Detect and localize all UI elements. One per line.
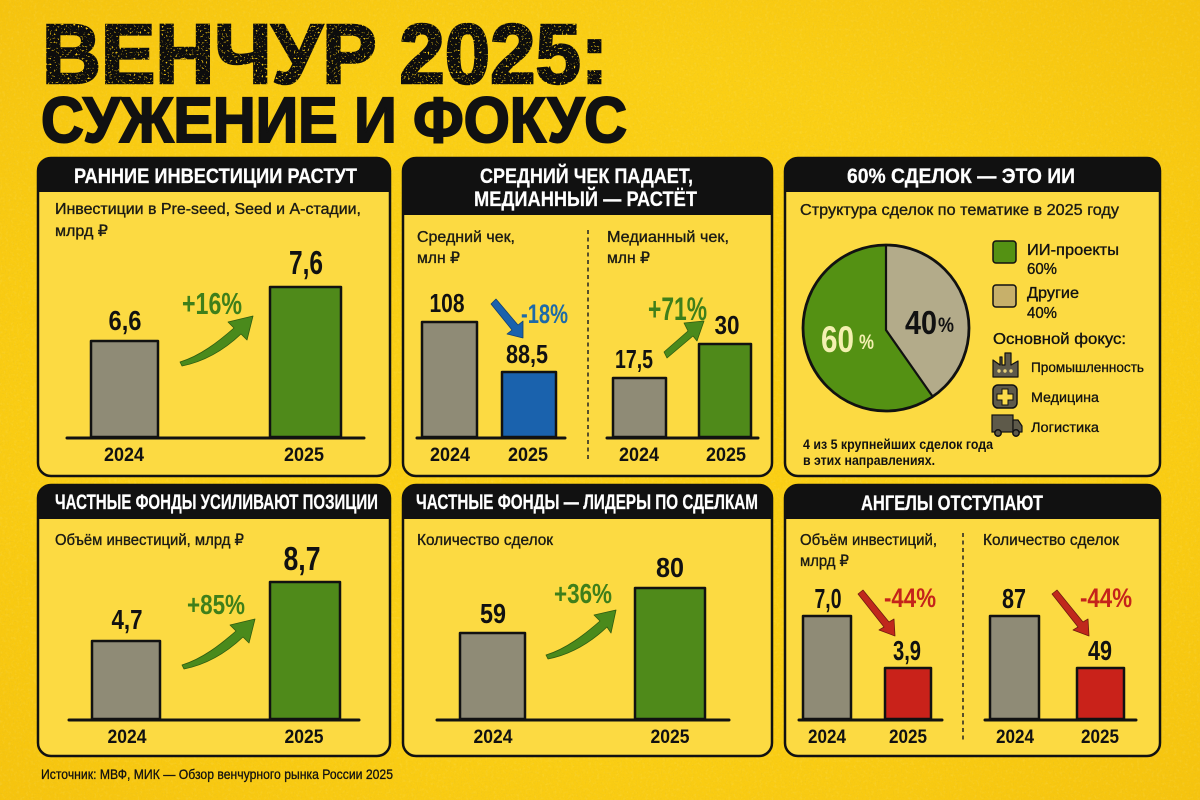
bar chart: median check: 17,5 (615, 344, 653, 374)
subtitle: private funds deals: Количество сделок (417, 532, 554, 549)
icon: medicine (993, 385, 1017, 408)
subtitle: angels volume: Объём инвестиций, (800, 532, 937, 549)
title: ВЕНЧУР 2025: (42, 7, 608, 101)
note: в этих направлениях. (803, 452, 935, 468)
bar chart: early investments: 7,6 (289, 244, 323, 281)
growth label +71%: +71% (648, 291, 707, 327)
subtitle: angels deals: Количество сделок (983, 532, 1120, 549)
heading: angels: АНГЕЛЫ ОТСТУПАЮТ (861, 492, 1043, 515)
bar chart: angels volume: 2025 (889, 727, 927, 748)
bar chart: median check: 2024 (619, 445, 659, 466)
legend: 60% (1027, 261, 1057, 278)
growth label +16%: +16% (182, 286, 242, 321)
note (803, 436, 993, 468)
bar chart: angels volume (799, 583, 942, 748)
bar chart: angels deals: 49 (1088, 635, 1112, 666)
label: medicine: Медицина (1031, 389, 1099, 405)
bar chart: average check: 108 (430, 288, 464, 318)
bar chart: private funds volume: 2024 (108, 727, 147, 748)
subtitle: private funds volume: Объём инвестиций, млрд ₽ (55, 532, 244, 549)
bar chart: private funds volume: 8,7 (284, 540, 320, 577)
bar chart: private funds deals (437, 552, 729, 748)
icon: factory (993, 353, 1018, 377)
legend: 40% (1027, 305, 1057, 322)
note: 4 из 5 крупнейших сделок года (803, 436, 993, 452)
arrow: growth (546, 610, 616, 659)
heading: early investments: РАННИЕ ИНВЕСТИЦИИ РАСТУТ (74, 165, 357, 188)
bar chart: private funds volume: 2025 (284, 727, 324, 748)
bar chart: early investments (67, 244, 364, 466)
bar chart: early investments: 6,6 (108, 305, 142, 336)
label: logistics: Логистика (1031, 419, 1099, 435)
legend: ИИ-проекты (1027, 242, 1119, 259)
title (41, 7, 627, 156)
bar chart: private funds volume (69, 540, 359, 748)
subtitle: early investments: млрд ₽ (55, 223, 108, 240)
subtitle: early investments (55, 201, 361, 240)
subtitle: average check: Средний чек, (417, 229, 515, 246)
heading: average and median check (474, 164, 697, 211)
source note: Источник: МВФ, МИК — Обзор венчурного рынка России 2025 (41, 766, 393, 782)
arrow: decline (858, 590, 895, 636)
decline label -44%: -44% (884, 583, 936, 613)
bar chart: private funds deals: 59 (480, 598, 506, 629)
panel: AI deals (785, 158, 1160, 476)
panel: angels (785, 485, 1160, 756)
subtitle: early investments: Инвестиции в Pre-seed, Seed и A-стадии, (55, 201, 361, 218)
bar chart: angels deals: 2024 (996, 727, 1034, 748)
subtitle: average check: млн ₽ (417, 250, 460, 267)
label: industry: Промышленность (1031, 359, 1144, 375)
pie chart: % (859, 331, 874, 354)
bar chart: angels deals: 87 (1002, 583, 1026, 614)
title: СУЖЕНИЕ И ФОКУС (41, 84, 627, 156)
arrow: growth (182, 619, 255, 669)
subtitle: median check: млн ₽ (607, 250, 650, 267)
bar chart: private funds volume: 4,7 (112, 604, 142, 635)
bar chart: angels deals: 2025 (1081, 727, 1119, 748)
bar chart: average check: 88,5 (506, 339, 548, 369)
legend (993, 241, 1119, 322)
panel: private funds volume (38, 485, 390, 756)
bar chart: median check: 30 (714, 310, 740, 340)
bar chart: early investments: 2025 (284, 445, 324, 466)
bar chart: average check: 2025 (508, 445, 548, 466)
heading: AI deals: 60% СДЕЛОК — ЭТО ИИ (847, 165, 1075, 188)
subtitle: angels volume (800, 532, 937, 570)
panel: private funds deals (403, 485, 772, 756)
bar chart: angels volume: 7,0 (814, 583, 842, 614)
pie chart: 40 (905, 304, 937, 341)
heading: private funds volume: ЧАСТНЫЕ ФОНДЫ УСИЛИВАЮТ ПОЗИЦИИ (55, 491, 378, 514)
subtitle: average check (417, 229, 515, 267)
pie chart (803, 245, 970, 411)
bar chart: angels volume: 3,9 (893, 635, 921, 666)
bar chart: private funds deals: 2024 (474, 727, 513, 748)
growth label +85%: +85% (187, 589, 245, 620)
heading: average and median check: МЕДИАННЫЙ — РАСТЁТ (474, 187, 697, 211)
bar chart: median check (607, 310, 758, 466)
arrow: decline (1052, 590, 1089, 636)
subtitle: angels volume: млрд ₽ (800, 553, 849, 570)
bar chart: private funds deals: 2025 (650, 727, 690, 748)
legend: Другие (1027, 285, 1079, 302)
bar chart: early investments: 2024 (104, 445, 144, 466)
bar chart: average check (417, 288, 565, 466)
icon: truck (992, 415, 1022, 436)
bar chart: angels volume: 2024 (808, 727, 846, 748)
panel: early investments (38, 158, 390, 476)
focus heading: Основной фокус: (993, 331, 1126, 348)
pie chart: 60 (821, 319, 854, 360)
bar chart: average check: 2024 (430, 445, 470, 466)
heading: average and median check: СРЕДНИЙ ЧЕК ПАДАЕТ, (480, 164, 693, 188)
arrow: growth (180, 316, 253, 366)
heading: private funds deals: ЧАСТНЫЕ ФОНДЫ — ЛИДЕРЫ ПО СДЕЛКАМ (416, 491, 758, 514)
subtitle: median check: Медианный чек, (607, 229, 729, 246)
pie chart: % (938, 314, 954, 337)
panel: average and median check (403, 158, 772, 476)
arrow: decline (491, 299, 523, 338)
subtitle: AI deals: Структура сделок по тематике в 2025 году (800, 202, 1119, 219)
decline label -18%: -18% (521, 299, 568, 329)
arrow: growth (664, 321, 704, 358)
subtitle: median check (607, 229, 729, 267)
decline label -44%: -44% (1080, 583, 1132, 613)
bar chart: private funds deals: 80 (656, 552, 684, 583)
bar chart: angels deals (985, 583, 1136, 748)
bar chart: median check: 2025 (706, 445, 746, 466)
growth label +36%: +36% (554, 578, 612, 609)
